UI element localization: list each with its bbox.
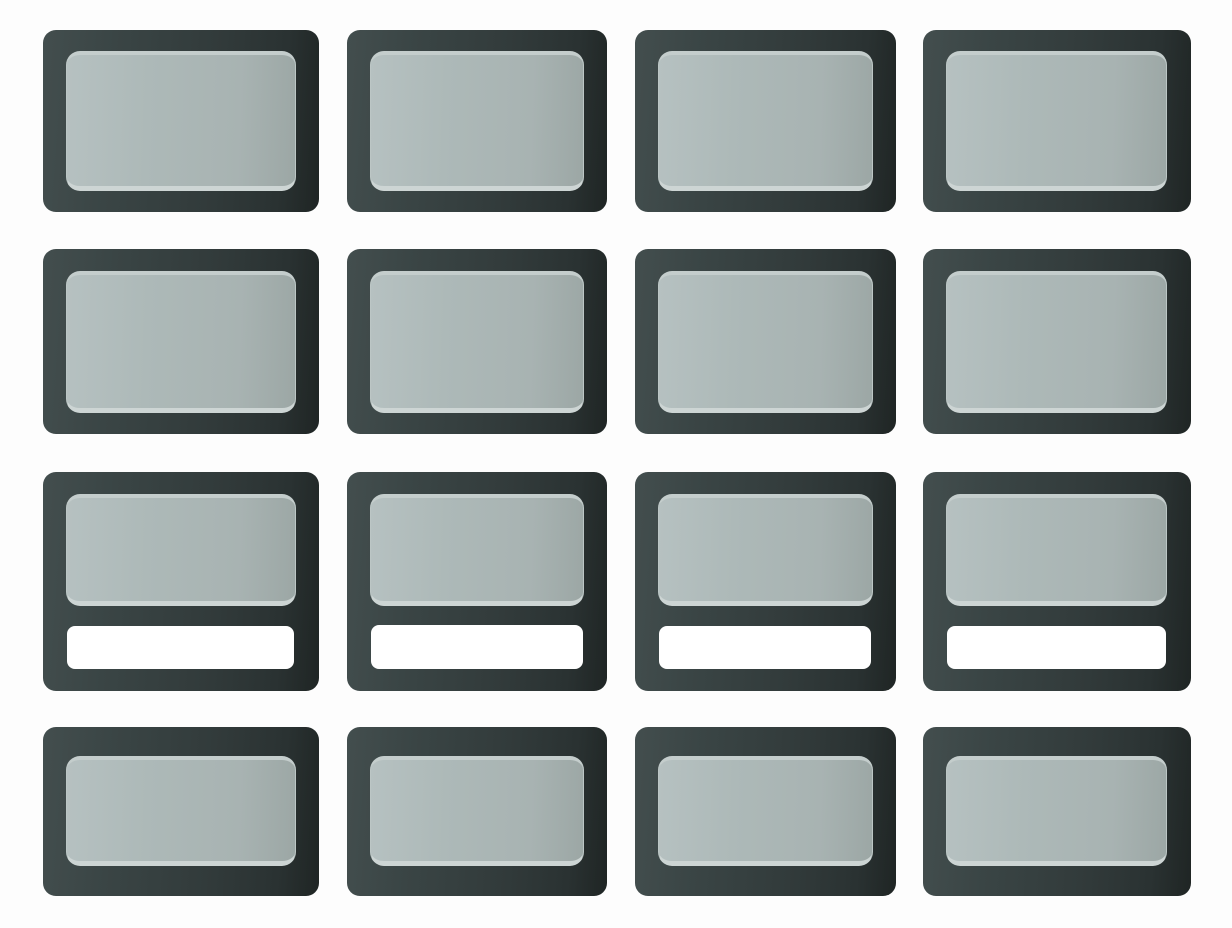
white label slot	[67, 626, 294, 669]
card row 4 column 1	[43, 727, 319, 896]
screen panel	[658, 756, 873, 866]
screen panel	[946, 271, 1167, 413]
screen panel	[370, 756, 584, 866]
card row 1 column 4	[923, 30, 1191, 212]
screen panel	[658, 271, 873, 413]
screen panel	[946, 51, 1167, 191]
card row 4 column 4	[923, 727, 1191, 896]
screen panel	[658, 494, 873, 606]
card row 3 column 3	[635, 472, 896, 691]
screen panel	[946, 756, 1167, 866]
card row 2 column 2	[347, 249, 607, 434]
screen panel	[370, 271, 584, 413]
screen panel	[658, 51, 873, 191]
card row 1 column 1	[43, 30, 319, 212]
white label slot	[947, 626, 1166, 669]
card row 4 column 2	[347, 727, 607, 896]
screen panel	[66, 494, 296, 606]
card row 4 column 3	[635, 727, 896, 896]
screen panel	[946, 494, 1167, 606]
card row 1 column 3	[635, 30, 896, 212]
card row 2 column 1	[43, 249, 319, 434]
screen panel	[370, 494, 584, 606]
card row 3 column 4	[923, 472, 1191, 691]
card row 3 column 2	[347, 472, 607, 691]
screen panel	[66, 51, 296, 191]
screen panel	[66, 756, 296, 866]
screen panel	[370, 51, 584, 191]
screen panel	[66, 271, 296, 413]
white label slot	[371, 625, 583, 669]
white label slot	[659, 626, 871, 669]
card row 2 column 4	[923, 249, 1191, 434]
card row 2 column 3	[635, 249, 896, 434]
card row 1 column 2	[347, 30, 607, 212]
card row 3 column 1	[43, 472, 319, 691]
